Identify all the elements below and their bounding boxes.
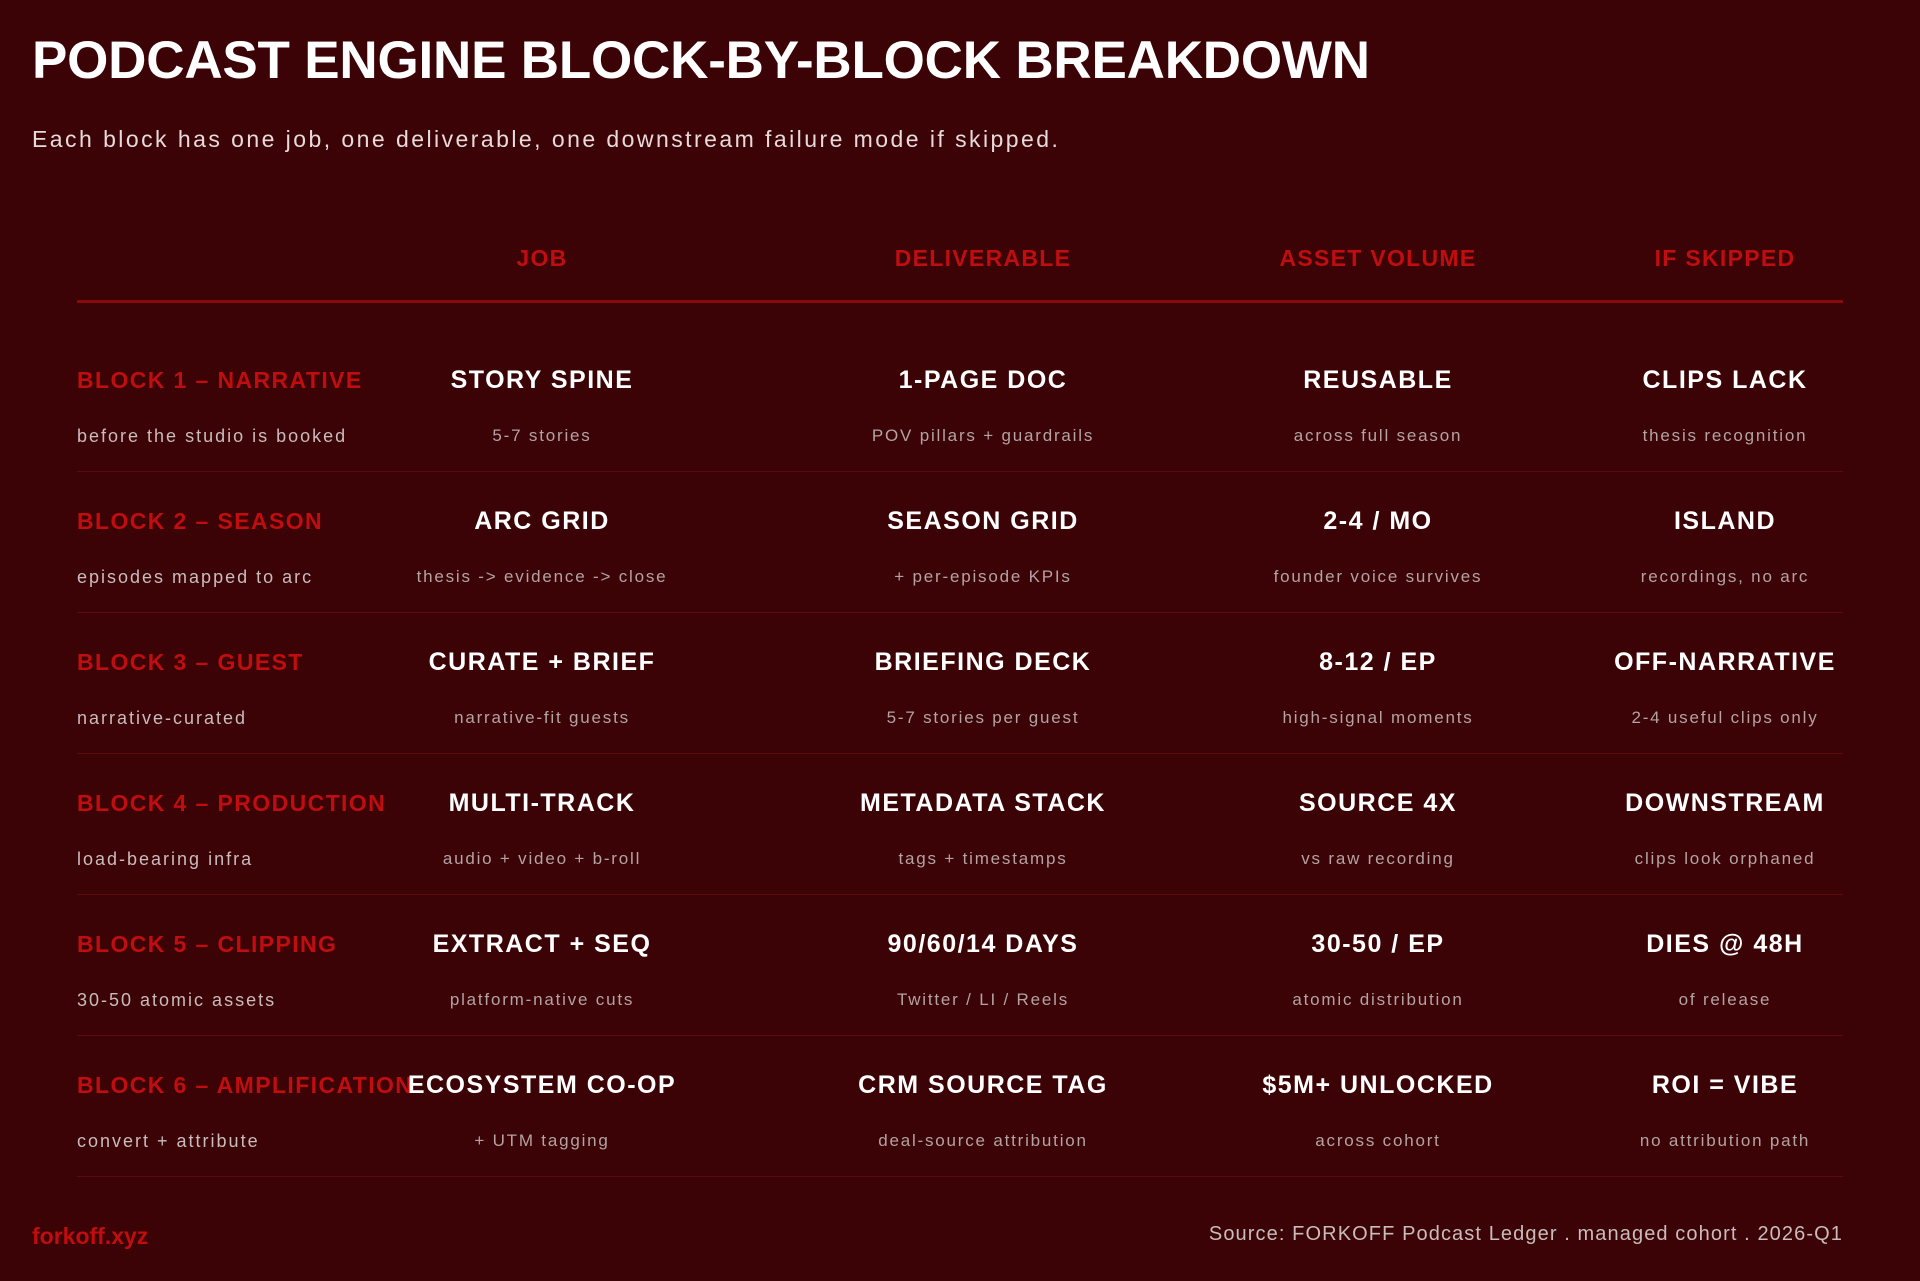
row: block 4: vs raw recording [1301, 849, 1455, 868]
row: block 3: high-signal moments [1282, 708, 1474, 727]
row: block 6: deal-source attribution [878, 1131, 1088, 1150]
row: block 6: CRM SOURCE TAG [858, 1071, 1108, 1099]
row: block 4: DOWNSTREAM [1625, 789, 1825, 817]
header row: ASSET VOLUME [1279, 245, 1477, 271]
row: block 4: clips look orphaned [1635, 849, 1815, 868]
footer source: Source: FORKOFF Podcast Ledger . managed cohort . 2026-Q1 [1209, 1223, 1843, 1245]
row: block 1: CLIPS LACK [1642, 366, 1808, 394]
row: block 5: 30-50 / EP [1311, 930, 1445, 958]
row: block 5: of release [1679, 990, 1771, 1009]
row: block 2: founder voice survives [1274, 567, 1482, 586]
row: block 5: 90/60/14 DAYS [888, 930, 1078, 958]
row: block 4: SOURCE 4X [1299, 789, 1457, 817]
row: block 2: thesis -> evidence -> close [417, 567, 667, 586]
row: block 4: BLOCK 4 – PRODUCTION [77, 790, 386, 816]
row: block 2 [77, 507, 1843, 613]
row: block 1: 5-7 stories [492, 426, 592, 445]
row: block 1: across full season [1294, 426, 1462, 445]
row: block 2: + per-episode KPIs [894, 567, 1072, 586]
row: block 6: convert + attribute [77, 1131, 260, 1151]
row: block 3: 2-4 useful clips only [1631, 708, 1819, 727]
header row: IF SKIPPED [1655, 245, 1795, 271]
row: block 2: 2-4 / MO [1323, 507, 1433, 535]
row: block 2: episodes mapped to arc [77, 567, 313, 587]
row: block 5 [77, 930, 1843, 1036]
row: block 1 [77, 366, 1843, 472]
row: block 1: 1-PAGE DOC [899, 366, 1067, 394]
row: block 6: + UTM tagging [474, 1131, 610, 1150]
row: block 1: REUSABLE [1303, 366, 1453, 394]
row: block 3: narrative-fit guests [454, 708, 630, 727]
row: block 4: MULTI-TRACK [449, 789, 635, 817]
row: block 6: BLOCK 6 – AMPLIFICATION [77, 1072, 413, 1098]
row: block 4 [77, 789, 1843, 895]
header row: JOB [516, 245, 568, 271]
header row [77, 245, 1843, 303]
row: block 1: before the studio is booked [77, 426, 347, 446]
row: block 3: 5-7 stories per guest [887, 708, 1079, 727]
row: block 5: platform-native cuts [450, 990, 634, 1009]
row: block 3: narrative-curated [77, 708, 247, 728]
row: block 3: BRIEFING DECK [875, 648, 1091, 676]
row: block 3: OFF-NARRATIVE [1614, 648, 1836, 676]
row: block 5: EXTRACT + SEQ [433, 930, 651, 958]
row: block 4: METADATA STACK [860, 789, 1106, 817]
row: block 6 [77, 1071, 1843, 1177]
row: block 3: BLOCK 3 – GUEST [77, 649, 304, 675]
row: block 5: 30-50 atomic assets [77, 990, 276, 1010]
row: block 1: thesis recognition [1643, 426, 1807, 445]
row: block 6: ECOSYSTEM CO-OP [408, 1071, 676, 1099]
row: block 5: BLOCK 5 – CLIPPING [77, 931, 337, 957]
row: block 1: STORY SPINE [451, 366, 633, 394]
row: block 2: recordings, no arc [1641, 567, 1809, 586]
row: block 3: CURATE + BRIEF [429, 648, 655, 676]
row: block 4: load-bearing infra [77, 849, 253, 869]
row: block 6: $5M+ UNLOCKED [1262, 1071, 1494, 1099]
subtitle: Each block has one job, one deliverable, one downstream failure mode if skipped. [32, 126, 1060, 152]
row: block 6: no attribution path [1640, 1131, 1810, 1150]
row: block 5: atomic distribution [1292, 990, 1464, 1009]
row: block 1: POV pillars + guardrails [872, 426, 1094, 445]
row: block 3 [77, 648, 1843, 754]
row: block 5: DIES @ 48H [1646, 930, 1804, 958]
row: block 2: SEASON GRID [887, 507, 1079, 535]
row: block 4: tags + timestamps [898, 849, 1068, 868]
row: block 5: Twitter / LI / Reels [897, 990, 1069, 1009]
row: block 4: audio + video + b-roll [443, 849, 641, 868]
row: block 2: ARC GRID [474, 507, 610, 535]
row: block 2: BLOCK 2 – SEASON [77, 508, 323, 534]
row: block 6: ROI = VIBE [1652, 1071, 1798, 1099]
row: block 2: ISLAND [1674, 507, 1776, 535]
row: block 1: BLOCK 1 – NARRATIVE [77, 367, 363, 393]
title: PODCAST ENGINE BLOCK-BY-BLOCK BREAKDOWN [32, 31, 1370, 90]
row: block 3: 8-12 / EP [1319, 648, 1437, 676]
header row: DELIVERABLE [895, 245, 1071, 271]
row: block 6: across cohort [1315, 1131, 1441, 1150]
footer brand: forkoff.xyz [32, 1223, 148, 1249]
